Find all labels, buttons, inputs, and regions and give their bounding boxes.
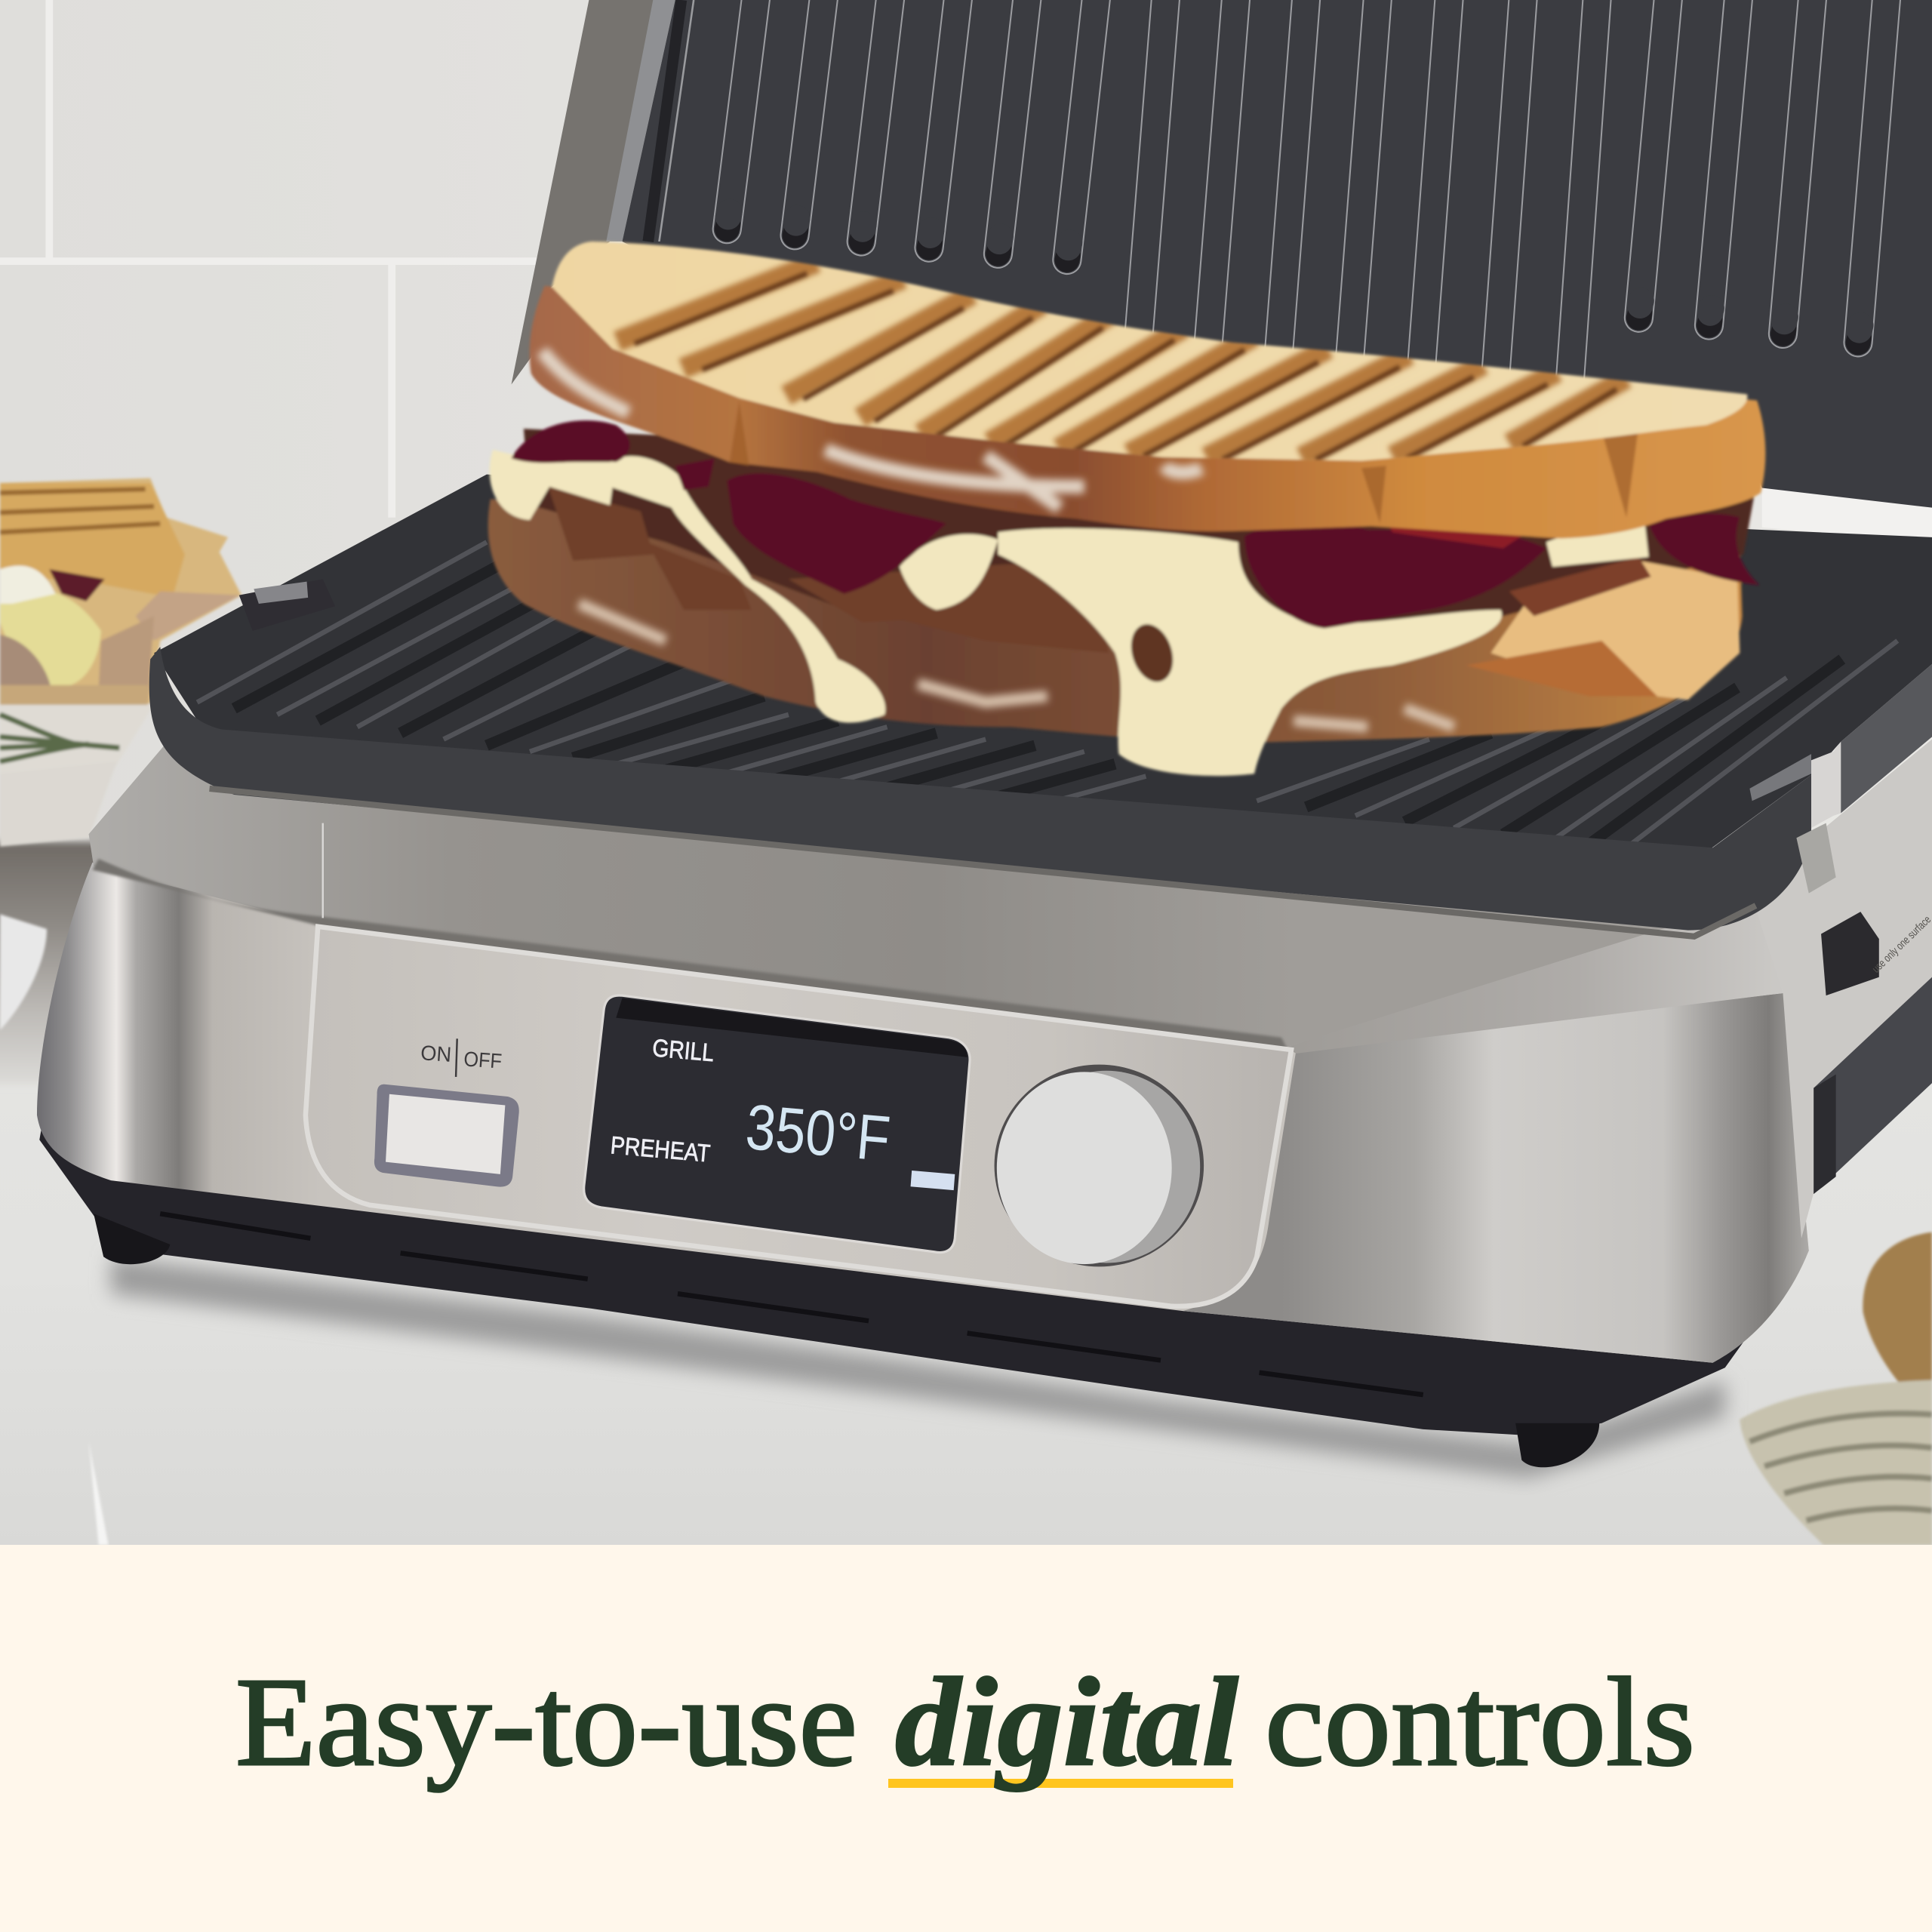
top bread toasted surface [552,242,1747,461]
crust flour dusting [542,351,1201,508]
plate right side band [1841,664,1932,814]
caption heading: digital [895,1652,1238,1792]
upper grill plate lid [512,0,1932,508]
bottom bread slice [488,499,1743,743]
caption heading: controls [1265,1652,1695,1792]
bowl at left edge [0,914,47,1030]
caption underline highlight [888,1779,1233,1788]
lid groove fills [727,0,1887,419]
lower grill plate [149,475,1932,937]
power button [374,1084,519,1187]
rosemary sprig [0,715,119,761]
plate right hinge tab [1811,742,1841,828]
plate ridges [197,542,1897,848]
right stainless section [1183,993,1809,1363]
display text: GRILL: GRILL [651,1033,715,1066]
digital display [584,995,970,1253]
lid frame [512,0,666,384]
second sandwich [0,478,242,703]
band lower dark stripe [92,859,1287,1050]
display text: PREHEAT: PREHEAT [610,1131,712,1168]
background: tiled wall [0,0,1932,888]
display temperature: 350°F [743,1091,893,1174]
on off label: ON [420,1041,452,1066]
side switch [1821,912,1879,995]
lid plate [622,0,1932,508]
vent slots [160,1214,1423,1395]
countertop [0,851,1932,1545]
meat filling [549,487,1109,653]
photo: grill on kitchen counter [0,0,1932,1545]
band seam [322,823,324,918]
wooden board and folded towel at right [1740,1232,1932,1545]
top bread crust [530,286,1765,538]
right side of grill [1749,740,1932,1238]
grill appliance base [37,740,1932,1467]
temperature dial [995,1065,1204,1266]
caption heading: Easy-to-use [235,1652,857,1792]
caption heading [235,1652,1695,1792]
caption panel [0,1545,1932,1932]
preheat progress bar [911,1171,955,1190]
dark gap under side plate [0,841,113,1084]
plate lower shadow line [210,789,1756,937]
counter reflection [89,1441,109,1545]
on off label: OFF [463,1047,503,1073]
on off label [420,1038,503,1077]
side plate with second sandwich [0,478,242,847]
lid left channel [648,0,681,242]
dark filling base [524,429,1756,653]
lid groove outlines [727,0,1887,419]
grill marks on bread [617,263,1626,460]
plate front lip [149,647,1811,931]
cranberry sauce [512,420,1759,629]
lid groove cap overlap [728,212,1860,331]
base feet [94,1214,1599,1467]
grey front band right [1285,900,1783,1054]
control panel inset [306,927,1291,1306]
flour dusting on bottom bread [579,604,1454,727]
grill shadow on counter [111,1257,1725,1478]
hero sandwich [488,242,1765,776]
stainless front [37,863,1809,1363]
lid groove end caps [727,224,1860,343]
cheese hole [1124,619,1180,688]
marble plate [0,705,154,841]
lid frame silver stripe [606,0,675,242]
plate cooking surface [154,475,1932,857]
plate left tab [239,579,335,631]
black base [39,1084,1809,1467]
side drip tray [1814,977,1932,1194]
melted cheese [490,450,1648,776]
taupe top band [89,743,1756,1048]
